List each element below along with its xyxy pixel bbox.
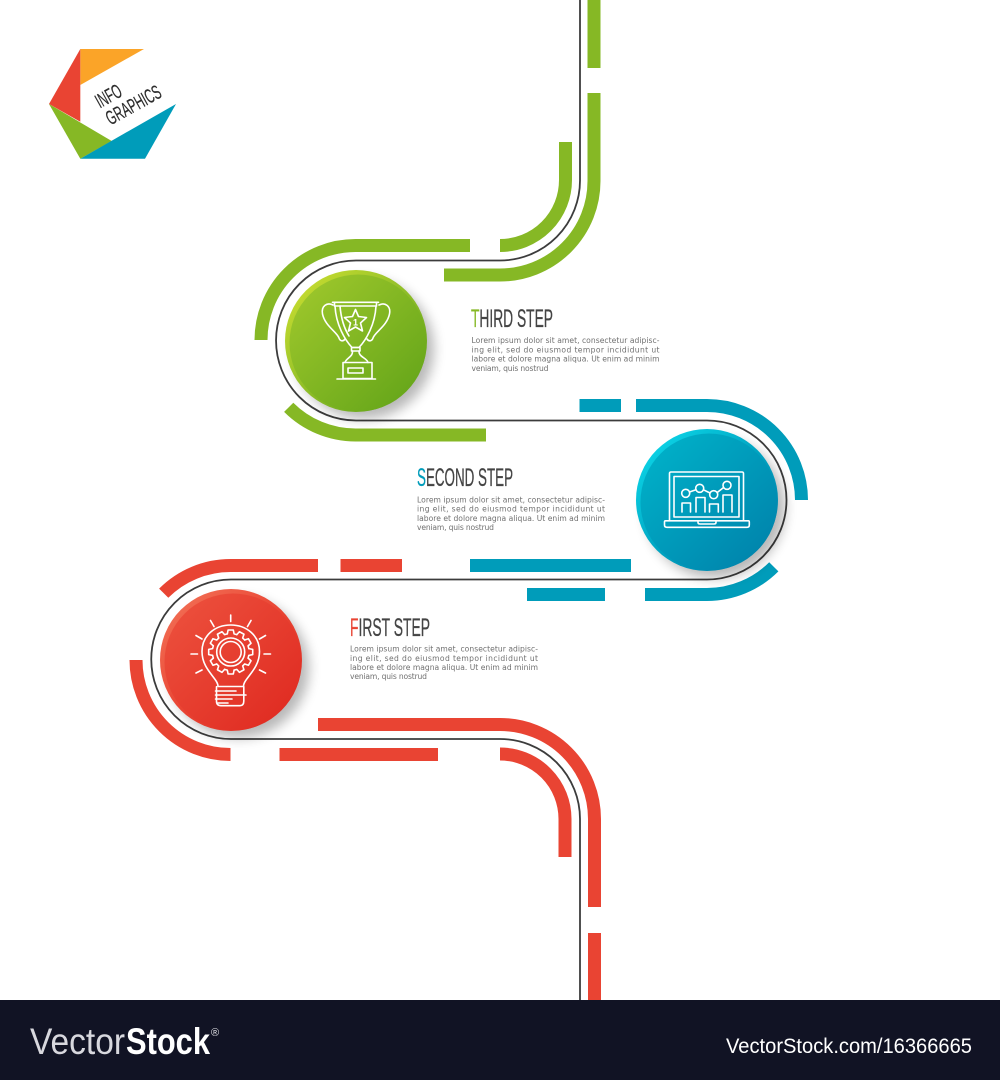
icon: trophy: 1 [353,318,358,328]
logo: info graphics hexagon [49,49,176,159]
logo: info graphics hexagon: INFO [92,81,126,113]
footer bar: watermark [0,1000,1000,1080]
text block: third step: labore et dolore magna aliqua. Ut enim ad minim [472,355,660,364]
text block: third step: veniam, quis nostrud [472,364,549,373]
text block: second step: ing elit, sed do eiusmod tempor incididunt ut [417,505,605,514]
road centre line [151,0,786,1000]
text block: second step [417,464,605,532]
blue road dashes [470,405,802,594]
text block: third step: Lorem ipsum dolor sit amet, consectetur adipisc- [472,336,660,345]
text block: first step: veniam, quis nostrud [350,672,427,681]
green road dashes [261,0,594,435]
footer bar: watermark: ® [211,1027,219,1039]
text block: third step: ing elit, sed do eiusmod tempor incididunt ut [472,345,660,354]
text block: first step: Lorem ipsum dolor sit amet, consectetur adipisc- [350,645,538,654]
logo: info graphics hexagon: GRAPHICS [102,82,165,130]
footer bar: watermark: Vector [30,1021,125,1062]
text block: second step: SECOND STEP [417,464,513,492]
footer bar: watermark: VectorStock.com/16366665 [726,1035,972,1058]
step 2 circle: blue with laptop chart icon [636,429,785,578]
text block: first step: labore et dolore magna aliqua. Ut enim ad minim [350,663,538,672]
text block: third step: THIRD STEP [471,305,553,333]
icon: laptop with chart [664,472,749,527]
footer bar: watermark: Stock [126,1021,210,1062]
icon: trophy [322,302,390,379]
text block: third step [471,305,660,373]
step 3 circle: green with trophy icon [285,270,434,419]
step 1 circle: red with light bulb gear icon [160,589,309,738]
text block: second step: Lorem ipsum dolor sit amet, consectetur adipisc- [417,495,605,504]
red road dashes [136,566,594,1000]
text block: first step [350,614,538,681]
icon: light bulb with gear [191,615,270,706]
text block: second step: veniam, quis nostrud [417,523,494,532]
text block: second step: labore et dolore magna aliqua. Ut enim ad minim [417,514,605,523]
text block: first step: ing elit, sed do eiusmod tempor incididunt ut [350,654,538,663]
text block: first step: FIRST STEP [350,614,430,642]
